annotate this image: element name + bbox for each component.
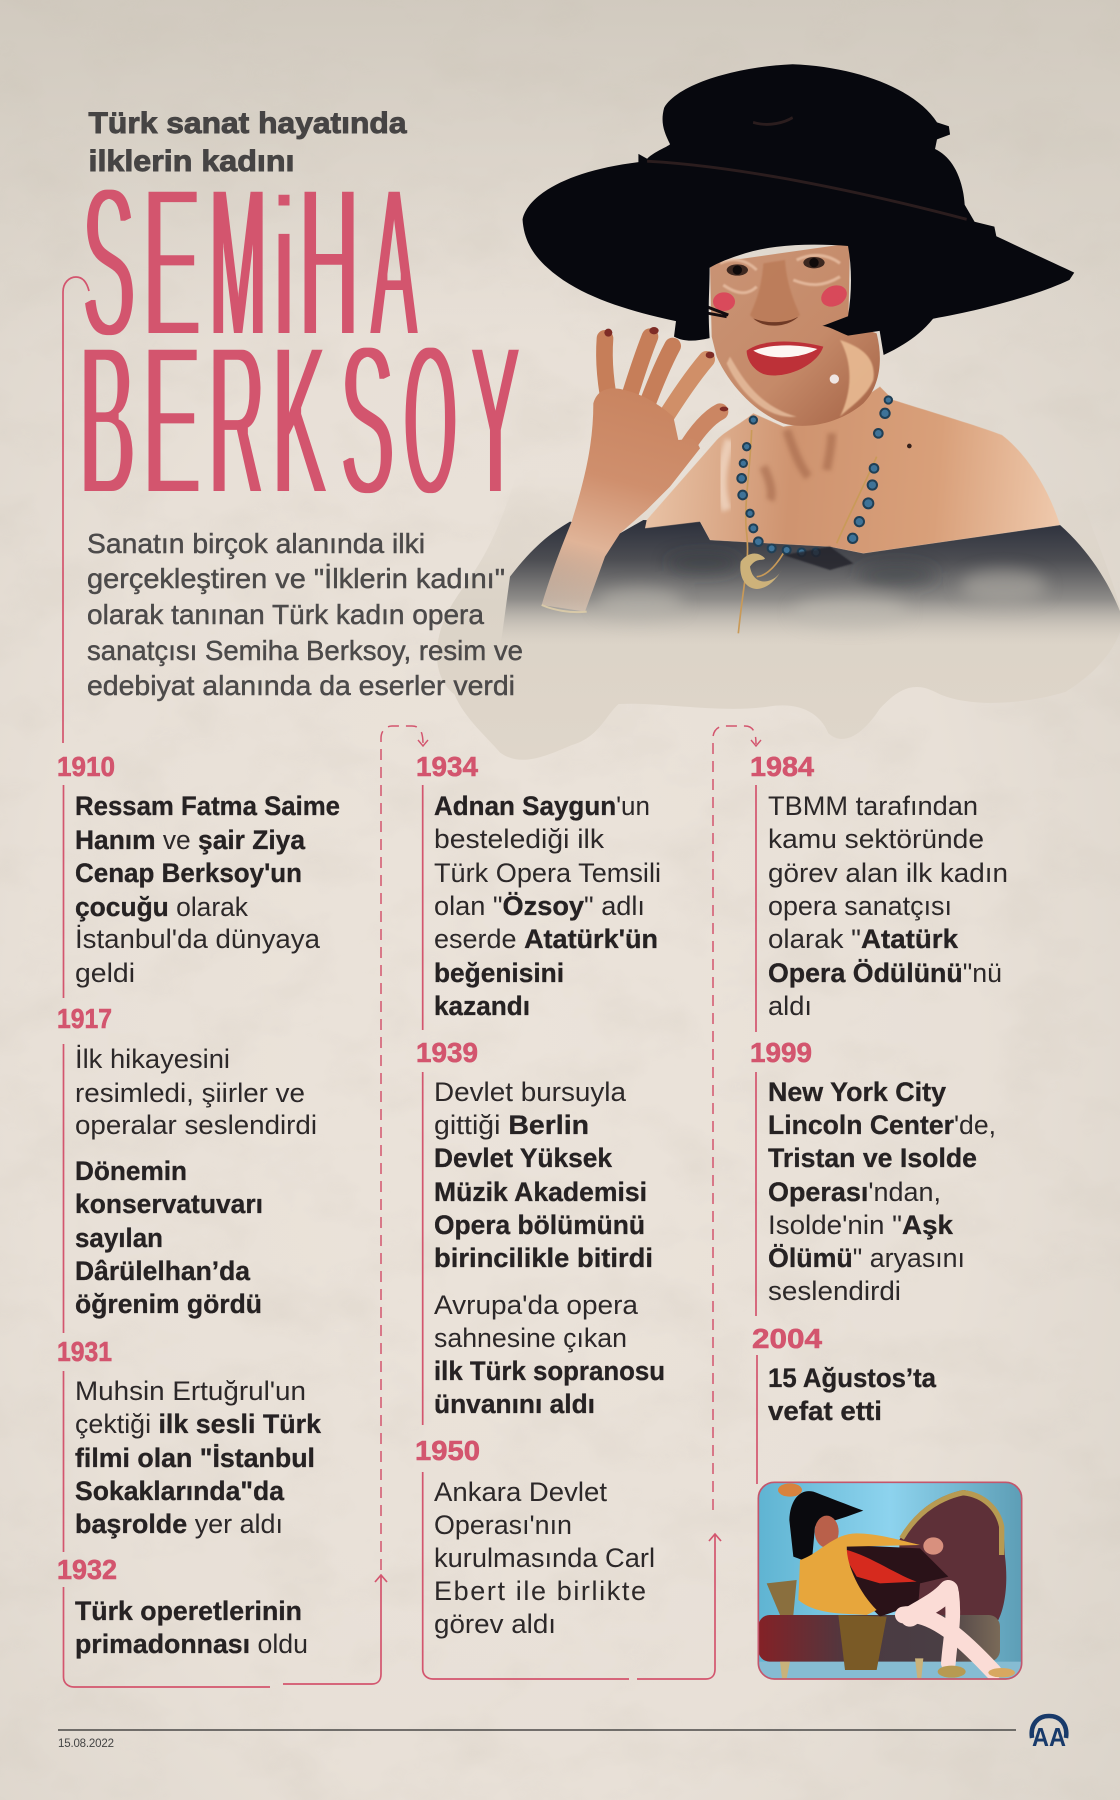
title: SEMiHA BERKSOY: S [341,302,394,540]
1939 year: 1939 [416,1037,478,1068]
dark dress [847,1545,948,1617]
1939 text: Devlet Yüksek [434,1143,613,1173]
eyes [727,257,825,276]
chaise back [899,1490,1006,1620]
1999 text: Lincoln Center'de, [768,1110,996,1140]
1917 text: sayılan [75,1223,163,1253]
title: SEMiHA BERKSOY: O [404,300,457,540]
1931 text [64,1371,322,1552]
1999 text [756,1072,996,1316]
photo: Semiha Berksoy portrait with hat [500,64,1120,650]
1934 text [423,785,661,1030]
heading: subtitle: Türk sanat hayatında [88,107,407,140]
intro paragraph: sanatçısı Semiha Berksoy, resim ve [87,635,523,666]
2004 text: vefat etti [768,1396,882,1426]
timeline connector: title to first column [63,277,89,743]
1932 text: primadonnası oldu [75,1629,308,1659]
1939 text: Müzik Akademisi [434,1177,647,1207]
intro paragraph: gerçekleştiren ve "İlklerin kadını" [87,563,505,594]
1910 year: 1910 [57,751,115,782]
1939 text: gittiği Berlin [434,1110,589,1140]
1934 text: bestelediği ilk [434,824,605,854]
1984 text: olarak "Atatürk [768,924,959,954]
1999 text: Tristan ve Isolde [768,1143,977,1173]
intro paragraph: edebiyat alanında da eserler verdi [87,670,515,701]
figure face [815,1516,839,1548]
dark collar shadow [783,547,853,570]
face [710,243,880,426]
title: SEMiHA BERKSOY: B [80,301,135,540]
1932 text: Türk operetlerinin [75,1596,302,1626]
title: SEMiHA BERKSOY: M [210,142,266,382]
watercolour stain behind the portrait [437,476,1120,760]
1917 text: öğrenim gördü [75,1289,262,1319]
title: SEMiHA BERKSOY: R [209,302,264,541]
1999 text: Ölümü" aryasını [768,1243,965,1273]
mouth [747,342,823,375]
1984 text: opera sanatçısı [768,891,952,921]
photo: Berksoy on stage on a chaise [758,1482,1022,1679]
1931 text: Sokaklarında"da [75,1476,285,1506]
1950 text: kurulmasında Carl [434,1543,655,1573]
1939 text: Devlet bursuyla [434,1077,627,1107]
intro paragraph: Sanatın birçok alanında ilki [87,528,425,559]
2004 year: 2004 [752,1323,822,1354]
fog patches on the dress [597,553,1047,627]
heading: subtitle [88,107,407,178]
1984 text: Opera Ödülünü"nü [768,958,1002,988]
1984 text [756,785,1008,1032]
nose [750,260,800,325]
1984 text: görev alan ilk kadın [768,858,1008,888]
1932 text [64,1587,308,1687]
2004 text [757,1355,937,1484]
1917 text: İlk hikayesini [75,1043,230,1074]
title: SEMiHA BERKSOY: E [144,302,200,540]
1950 text [423,1472,655,1679]
1999 text: Isolde'nin "Aşk [768,1210,954,1240]
1950 text: Operası'nın [434,1510,572,1540]
1917 text [64,1043,317,1333]
1917 text: konservatuvarı [75,1189,263,1219]
1910 text: çocuğu olarak [75,892,248,922]
1910 text [64,785,340,998]
floor [758,1662,1022,1679]
dress [500,520,1120,650]
1939 text: ünvanını aldı [434,1389,595,1419]
1950 text: Ankara Devlet [434,1477,607,1507]
chaise seat [758,1615,1000,1662]
1910 text: geldi [75,958,135,988]
figure hat [789,1491,863,1563]
intro paragraph: olarak tanınan Türk kadın opera [87,599,484,630]
1950 year: 1950 [415,1435,480,1466]
1932 year: 1932 [57,1554,117,1585]
1931 text: başrolde yer aldı [75,1509,283,1539]
golden cape [798,1533,920,1615]
1917 text: operalar seslendirdi [75,1110,317,1140]
1910 text: Cenap Berksoy'un [75,858,302,888]
gold drape [838,1615,887,1670]
pale legs [903,1590,993,1672]
1934 text: Adnan Saygun'un [434,791,650,821]
column 2 [415,751,665,1679]
1910 text: Hanım ve şair Ziya [75,825,306,855]
title: SEMiHA BERKSOY [80,142,520,541]
1931 text: çektiği ilk sesli Türk [75,1409,322,1439]
title: SEMiHA BERKSOY: Y [471,300,520,539]
1950 text: görev aldı [434,1609,556,1639]
1939 text: Avrupa'da opera [434,1290,639,1320]
blush [713,281,850,311]
shoes [938,1666,966,1678]
chest and shoulders [645,387,1060,553]
1939 text [423,1072,665,1425]
title: SEMiHA BERKSOY: S [83,143,135,383]
1934 text: beğenisini [434,958,564,988]
logo: Anadolu Agency: AA [1032,1722,1066,1752]
column 1 [57,751,340,1687]
1934 text: kazandı [434,991,530,1021]
1910 text: Ressam Fatma Saime [75,791,340,821]
earring [830,374,839,384]
title: SEMiHA BERKSOY: H [300,144,358,382]
1999 year: 1999 [750,1037,812,1068]
1917 text: Dönemin [75,1156,187,1186]
footer rule [58,1729,1016,1731]
1917 year: 1917 [57,1003,112,1034]
1934 text: Türk Opera Temsili [434,858,661,888]
1931 year: 1931 [57,1336,112,1367]
title: SEMiHA BERKSOY: A [371,142,417,382]
column 3 [750,751,1008,1484]
1984 text: kamu sektöründe [768,824,984,854]
hand and arm [542,327,728,612]
date: 15.08.2022 [58,1738,114,1750]
1939 text: sahnesine çıkan [434,1323,627,1353]
arrow: column 1 to column 2 [283,726,428,1684]
1934 text: eserde Atatürk'ün [434,924,658,954]
1939 text: ilk Türk sopranosu [434,1356,665,1386]
intro paragraph [87,528,523,701]
1999 text: seslendirdi [768,1276,901,1306]
title: SEMiHA BERKSOY: K [273,302,327,540]
1950 text: Ebert ile birlikte [434,1576,646,1606]
figure hand [923,1537,943,1555]
1984 text: TBMM tarafından [768,791,978,821]
1999 text: New York City [768,1077,946,1107]
title: SEMiHA BERKSOY: i [275,157,293,379]
red lining [846,1550,916,1584]
1910 text: İstanbul'da dünyaya [75,923,321,954]
title: SEMiHA BERKSOY: E [144,144,200,382]
hat and hair [523,64,1074,355]
1931 text: filmi olan "İstanbul [75,1443,315,1473]
1939 text: birincilikle bitirdi [434,1243,653,1273]
1917 text: resimledi, şiirler ve [75,1078,305,1108]
1934 year: 1934 [416,751,478,782]
1984 year: 1984 [750,751,814,782]
1999 text: Operası'ndan, [768,1177,941,1207]
arrow: column 2 to column 3 [637,726,761,1679]
1984 text: aldı [768,991,812,1021]
1917 text: Dârülelhan’da [75,1256,251,1286]
heading: subtitle: ilklerin kadını [88,145,294,178]
2004 text: 15 Ağustos’ta [768,1363,937,1393]
1931 text: Muhsin Ertuğrul'un [75,1376,306,1406]
necklace [737,396,892,633]
1934 text: olan "Özsoy" adlı [434,891,645,921]
1939 text: Opera bölümünü [434,1210,645,1240]
